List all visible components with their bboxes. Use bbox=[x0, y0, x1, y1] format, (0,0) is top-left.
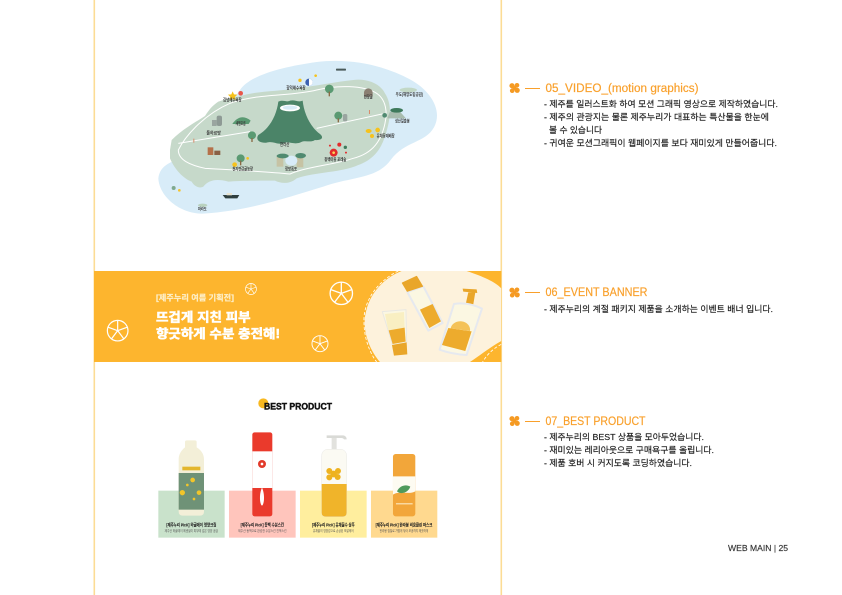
product card 3: 유채꿀의 영양감으로 손상된 모발케어 bbox=[313, 528, 354, 533]
banner background bbox=[94, 271, 501, 362]
map icons: trees bbox=[237, 85, 387, 165]
map place names bbox=[198, 85, 423, 212]
map place names: 새별오름 bbox=[236, 120, 246, 127]
map place names: 돌하르방 bbox=[206, 130, 221, 137]
description: 07 best product: - 재미있는 레리아웃으로 구매욕구를 올립니다. bbox=[544, 444, 714, 455]
description: 05 video: - 귀여운 모션그래픽이 웹페이지를 보다 재미있게 만들어줍니다. bbox=[544, 137, 777, 148]
product: pump bottle bbox=[440, 289, 482, 355]
map place names: 정방폭포 bbox=[285, 166, 297, 173]
banner headline: 뜨겁게 지친 피부 bbox=[156, 311, 251, 325]
description: 06 event banner: - 제주누리의 계절 패키지 제품을 소개하는 이벤트 배너 입니다. bbox=[544, 303, 773, 314]
sea background bbox=[158, 61, 437, 214]
event banner bbox=[94, 271, 501, 362]
description: 05 video: - 제주를 일러스트화 하여 모션 그래픽 영상으로 제작하였습니다. bbox=[544, 98, 778, 109]
product: tube bbox=[382, 310, 407, 356]
section marker bbox=[509, 288, 540, 298]
map place names: 유채꽃재배장 bbox=[377, 133, 395, 140]
description: 07 best product bbox=[509, 416, 714, 468]
section marker bbox=[509, 83, 540, 93]
product card 1: [제주누리 PicK] 하귤에이 영양크림 bbox=[166, 521, 216, 528]
description: 06 event banner: 06_EVENT BANNER bbox=[546, 287, 648, 299]
map place names: 천지연감귤농장 bbox=[232, 166, 253, 173]
map icons: ships bbox=[223, 69, 346, 198]
map place names: 만장굴 bbox=[364, 94, 373, 100]
description: 07 best product: 07_BEST PRODUCT bbox=[546, 416, 646, 428]
product: bottle bbox=[402, 276, 443, 331]
dashed outline bbox=[364, 271, 501, 362]
map place names: 김녕해수욕장 bbox=[223, 97, 242, 104]
product card 2: 제주산 동백으로 완성한 수분스킨 진액스킨 bbox=[238, 528, 286, 533]
description: 05 video: 볼 수 있습니다 bbox=[549, 124, 602, 135]
description: 05 video: 05_VIDEO_(motion graphics) bbox=[546, 83, 699, 95]
banner headline: 향긋하게 수분 충전해! bbox=[156, 326, 280, 341]
map icons: landmarks bbox=[172, 88, 417, 207]
map place names: 마라도 bbox=[198, 205, 207, 212]
decorative oranges bbox=[107, 282, 353, 352]
white roads bbox=[178, 87, 386, 174]
description: 07 best product: - 제품 호버 시 커지도록 코딩하였습니다. bbox=[544, 458, 692, 468]
product card 4: 한라봉 껍질로 가볍게 닦아 모공까지 깨끗하게 bbox=[380, 528, 428, 533]
section heading bbox=[258, 398, 332, 411]
Hallasan mountain bbox=[257, 100, 322, 144]
description: 05 video bbox=[509, 83, 778, 148]
banner eyebrow: [제주누리 여름 기획전] bbox=[156, 292, 234, 302]
product card 3: [제주누리 PicK] 유채꿀수 샴푸 bbox=[312, 521, 355, 528]
product card 1: 제주산 하귤에이 에센셜이 피부에 깊은 영양 공급 bbox=[165, 528, 218, 533]
map place names: 우도(해양도립공원) bbox=[396, 91, 423, 98]
island bbox=[170, 80, 390, 187]
map place names: 함덕해수욕장 bbox=[286, 85, 306, 92]
map icons: flowers and stars bbox=[193, 74, 380, 167]
best product section bbox=[158, 398, 437, 538]
product card 2: [제주누리 PicK] 동백 수분스킨 bbox=[241, 521, 284, 528]
product card 4 bbox=[371, 454, 437, 538]
illustrated Jeju map bbox=[158, 61, 437, 214]
map place names: 동백마을 포레숲 bbox=[324, 156, 346, 163]
description: 07 best product: - 제주누리의 BEST 상품을 모아두었습니다. bbox=[544, 431, 704, 442]
description: 05 video: - 제주의 관광지는 물론 제주누리가 대표하는 특산물을 한눈에 bbox=[544, 111, 769, 122]
page number: WEB MAIN | 25 bbox=[728, 543, 788, 553]
map place names: 성산일출봉 bbox=[395, 118, 410, 125]
product card 1 bbox=[158, 440, 225, 538]
page guide lines bbox=[94, 0, 502, 595]
product card 3 bbox=[300, 435, 367, 538]
banner headline bbox=[156, 311, 280, 341]
map place names: 한라산 bbox=[280, 141, 289, 148]
section marker bbox=[509, 416, 540, 426]
cream blob bbox=[365, 271, 501, 362]
product card 4: [제주누리 PicK] 한라봉 비움클린 마스크 bbox=[376, 521, 432, 528]
section heading: BEST PRODUCT bbox=[264, 401, 332, 411]
description: 06 event banner bbox=[509, 287, 773, 314]
product card 2 bbox=[229, 432, 296, 538]
